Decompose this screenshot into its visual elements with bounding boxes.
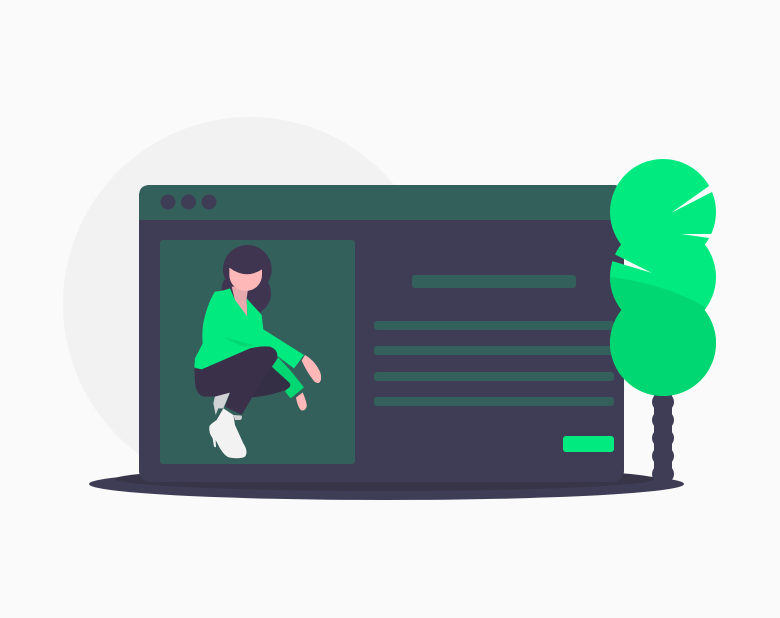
text line placeholders <box>374 321 614 406</box>
green button <box>563 436 614 452</box>
far arm sleeve <box>272 357 304 398</box>
background circle <box>63 117 437 491</box>
heading placeholder <box>412 275 576 288</box>
tree foliage <box>610 159 716 396</box>
ankle cuff <box>233 415 242 420</box>
face <box>229 268 262 291</box>
rear boot <box>213 392 230 415</box>
crouching woman figure <box>194 245 321 458</box>
tree trunk <box>652 392 674 484</box>
sweater fold <box>222 337 255 347</box>
hair <box>222 245 272 313</box>
near leg <box>194 346 277 415</box>
front boot <box>209 408 246 458</box>
far hand <box>296 392 307 411</box>
near hand <box>302 355 321 383</box>
foliage shading <box>610 277 716 396</box>
sweater <box>194 288 304 369</box>
image panel <box>160 240 355 464</box>
neck <box>232 287 248 317</box>
window header bar <box>139 185 624 220</box>
illustration <box>89 159 716 500</box>
ground shadow <box>89 467 684 500</box>
window body <box>139 185 624 482</box>
far leg <box>233 367 290 398</box>
tree <box>610 159 716 484</box>
window control dots <box>160 194 216 210</box>
browser window <box>139 185 624 482</box>
